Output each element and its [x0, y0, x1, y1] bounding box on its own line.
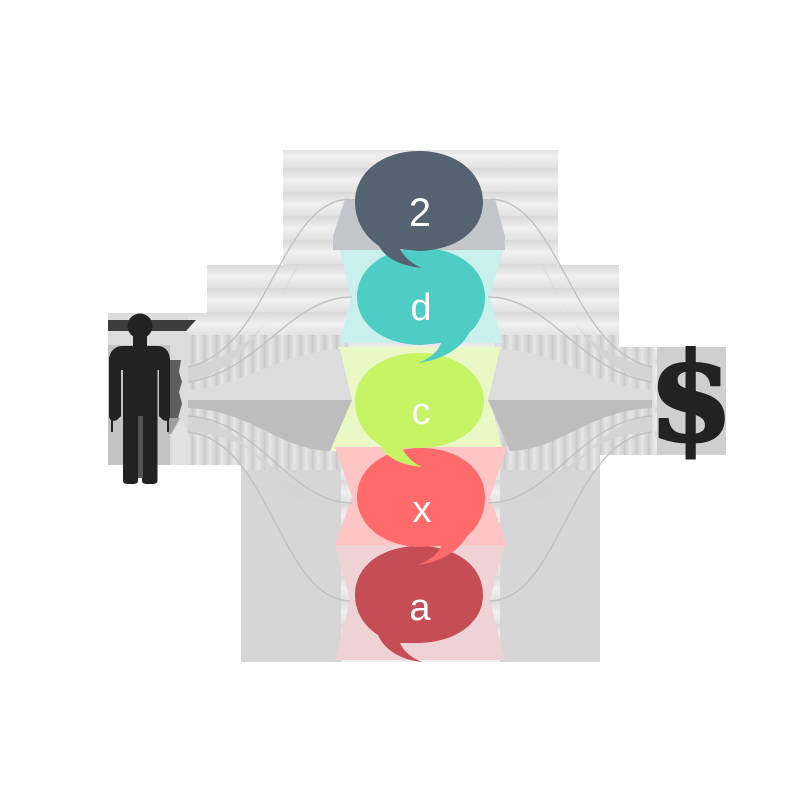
connector lines: [188, 199, 652, 601]
icon: person: [109, 314, 170, 484]
bubble: d: d: [410, 287, 432, 329]
bubble: x: x: [412, 489, 432, 531]
bubble: 2: 2: [409, 191, 431, 235]
bubble: c: c: [412, 391, 430, 433]
tinted halos around bubbles: [330, 199, 507, 660]
bubble: d: [357, 248, 485, 363]
central lens shape, lower half: [188, 400, 652, 451]
bubble: x: [357, 448, 485, 565]
bubble: 2: [355, 151, 483, 268]
central lens shape, upper half: [188, 349, 652, 400]
bubble: a: [355, 546, 483, 662]
background: grey artifact silhouette: [100, 140, 740, 670]
icon: dollar sign: $: [649, 325, 733, 469]
bubble: a: a: [409, 587, 431, 629]
band fills between connector lines: [188, 262, 652, 503]
bubble: c: [355, 353, 484, 467]
